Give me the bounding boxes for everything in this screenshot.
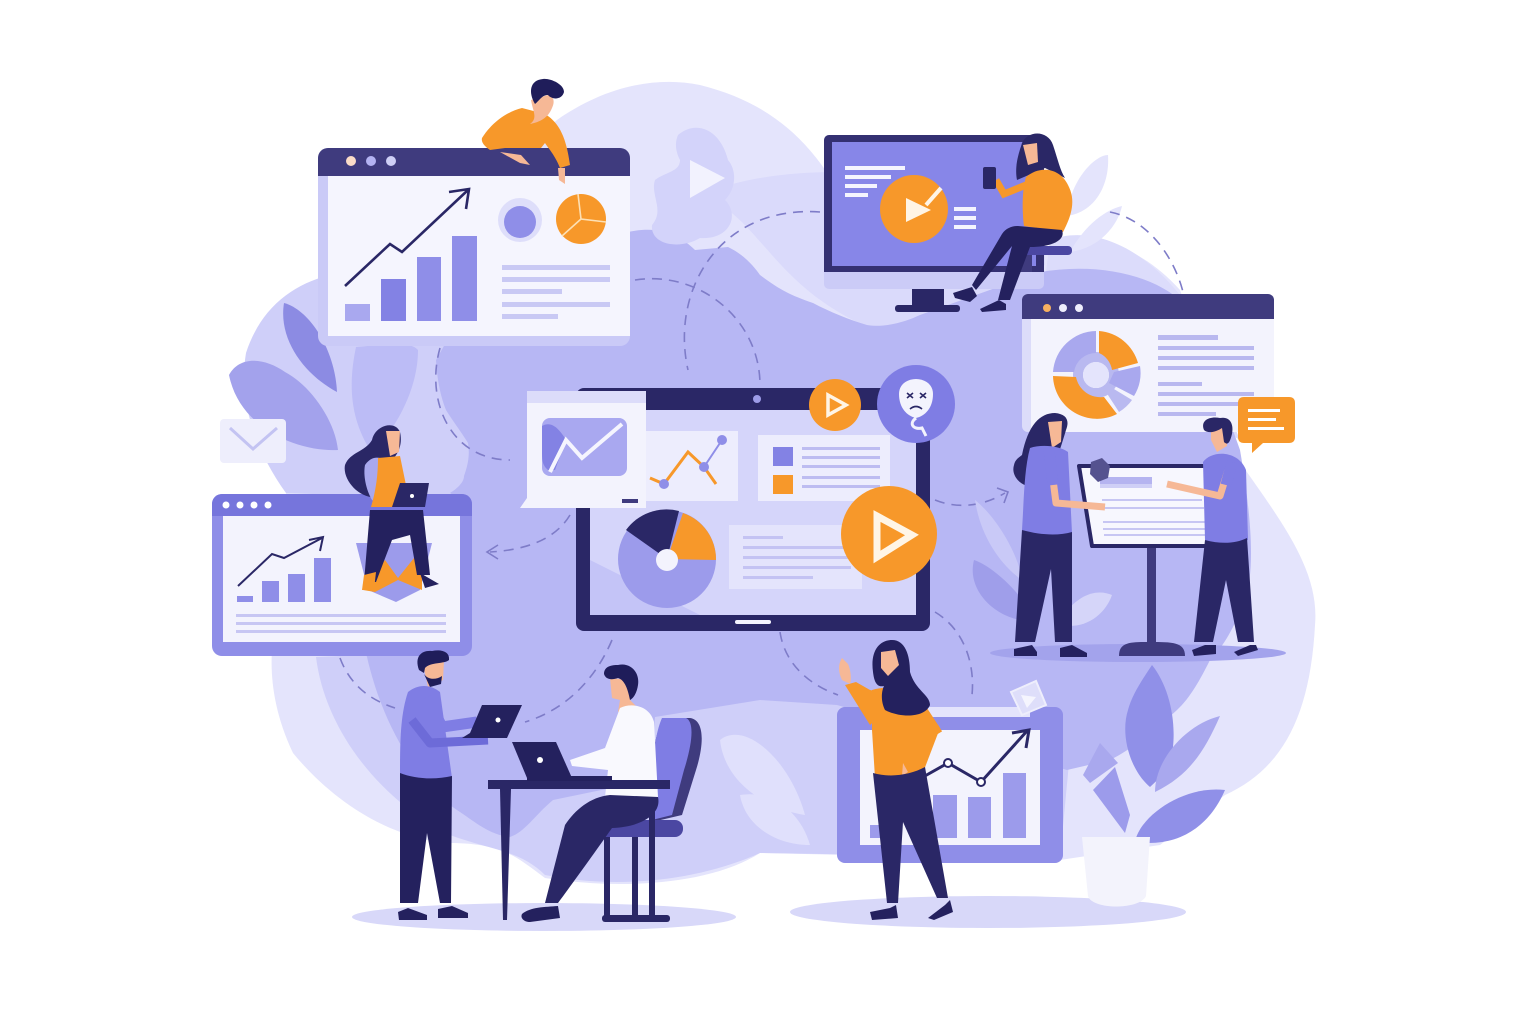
text lines xyxy=(502,265,610,319)
background blobs xyxy=(244,82,1315,884)
icon: small play card xyxy=(1011,681,1046,715)
pie chart xyxy=(556,194,606,244)
card: floating chart xyxy=(520,391,646,508)
person: man at board xyxy=(1167,418,1258,656)
left foliage xyxy=(229,303,418,453)
bottom foliage xyxy=(720,735,810,845)
bar chart xyxy=(237,558,331,602)
speech bubble xyxy=(1238,397,1295,453)
envelope icon xyxy=(220,419,286,463)
person: man seated at laptop xyxy=(521,664,658,922)
orange play dial xyxy=(880,175,948,243)
laptop xyxy=(512,742,612,781)
person: bearded man with tablet xyxy=(398,650,522,920)
panel: right browser with donut xyxy=(1022,294,1274,432)
shield motif xyxy=(356,543,432,602)
text lines xyxy=(1158,335,1254,416)
person: woman sitting on browser with laptop xyxy=(345,425,439,590)
list card xyxy=(758,435,890,501)
plant in pot xyxy=(1082,665,1225,906)
person: woman on stool with phone xyxy=(953,133,1072,312)
panel: top-right monitor xyxy=(824,135,1044,312)
person: woman in hijab waving xyxy=(839,640,953,920)
panel: top-left browser chart xyxy=(318,148,630,346)
icon: purple mask badge xyxy=(877,365,955,443)
board easel xyxy=(1079,466,1222,656)
donut xyxy=(498,198,542,242)
desk xyxy=(488,780,670,920)
chair xyxy=(594,718,702,922)
person: top leaning over browser xyxy=(482,79,570,184)
icon: large orange play xyxy=(841,486,937,582)
text card xyxy=(729,525,862,589)
screen text xyxy=(845,166,976,229)
ground shadows xyxy=(352,644,1286,931)
person: woman at board xyxy=(1013,413,1110,657)
panel: central tablet dashboard xyxy=(576,388,930,631)
leaves behind monitor xyxy=(1067,155,1122,252)
line chart card xyxy=(640,431,738,501)
dashed connectors xyxy=(340,212,1183,722)
foliage right lower xyxy=(973,500,1112,626)
icon: orange play small xyxy=(809,379,861,431)
dashed arrowheads xyxy=(487,488,1008,559)
donut chart xyxy=(1053,331,1141,419)
panel: bottom-right browser chart xyxy=(837,707,1063,863)
bar chart xyxy=(345,236,477,321)
panel: left browser chart xyxy=(212,494,472,656)
trend arrow xyxy=(345,189,469,286)
gauge xyxy=(618,510,716,608)
